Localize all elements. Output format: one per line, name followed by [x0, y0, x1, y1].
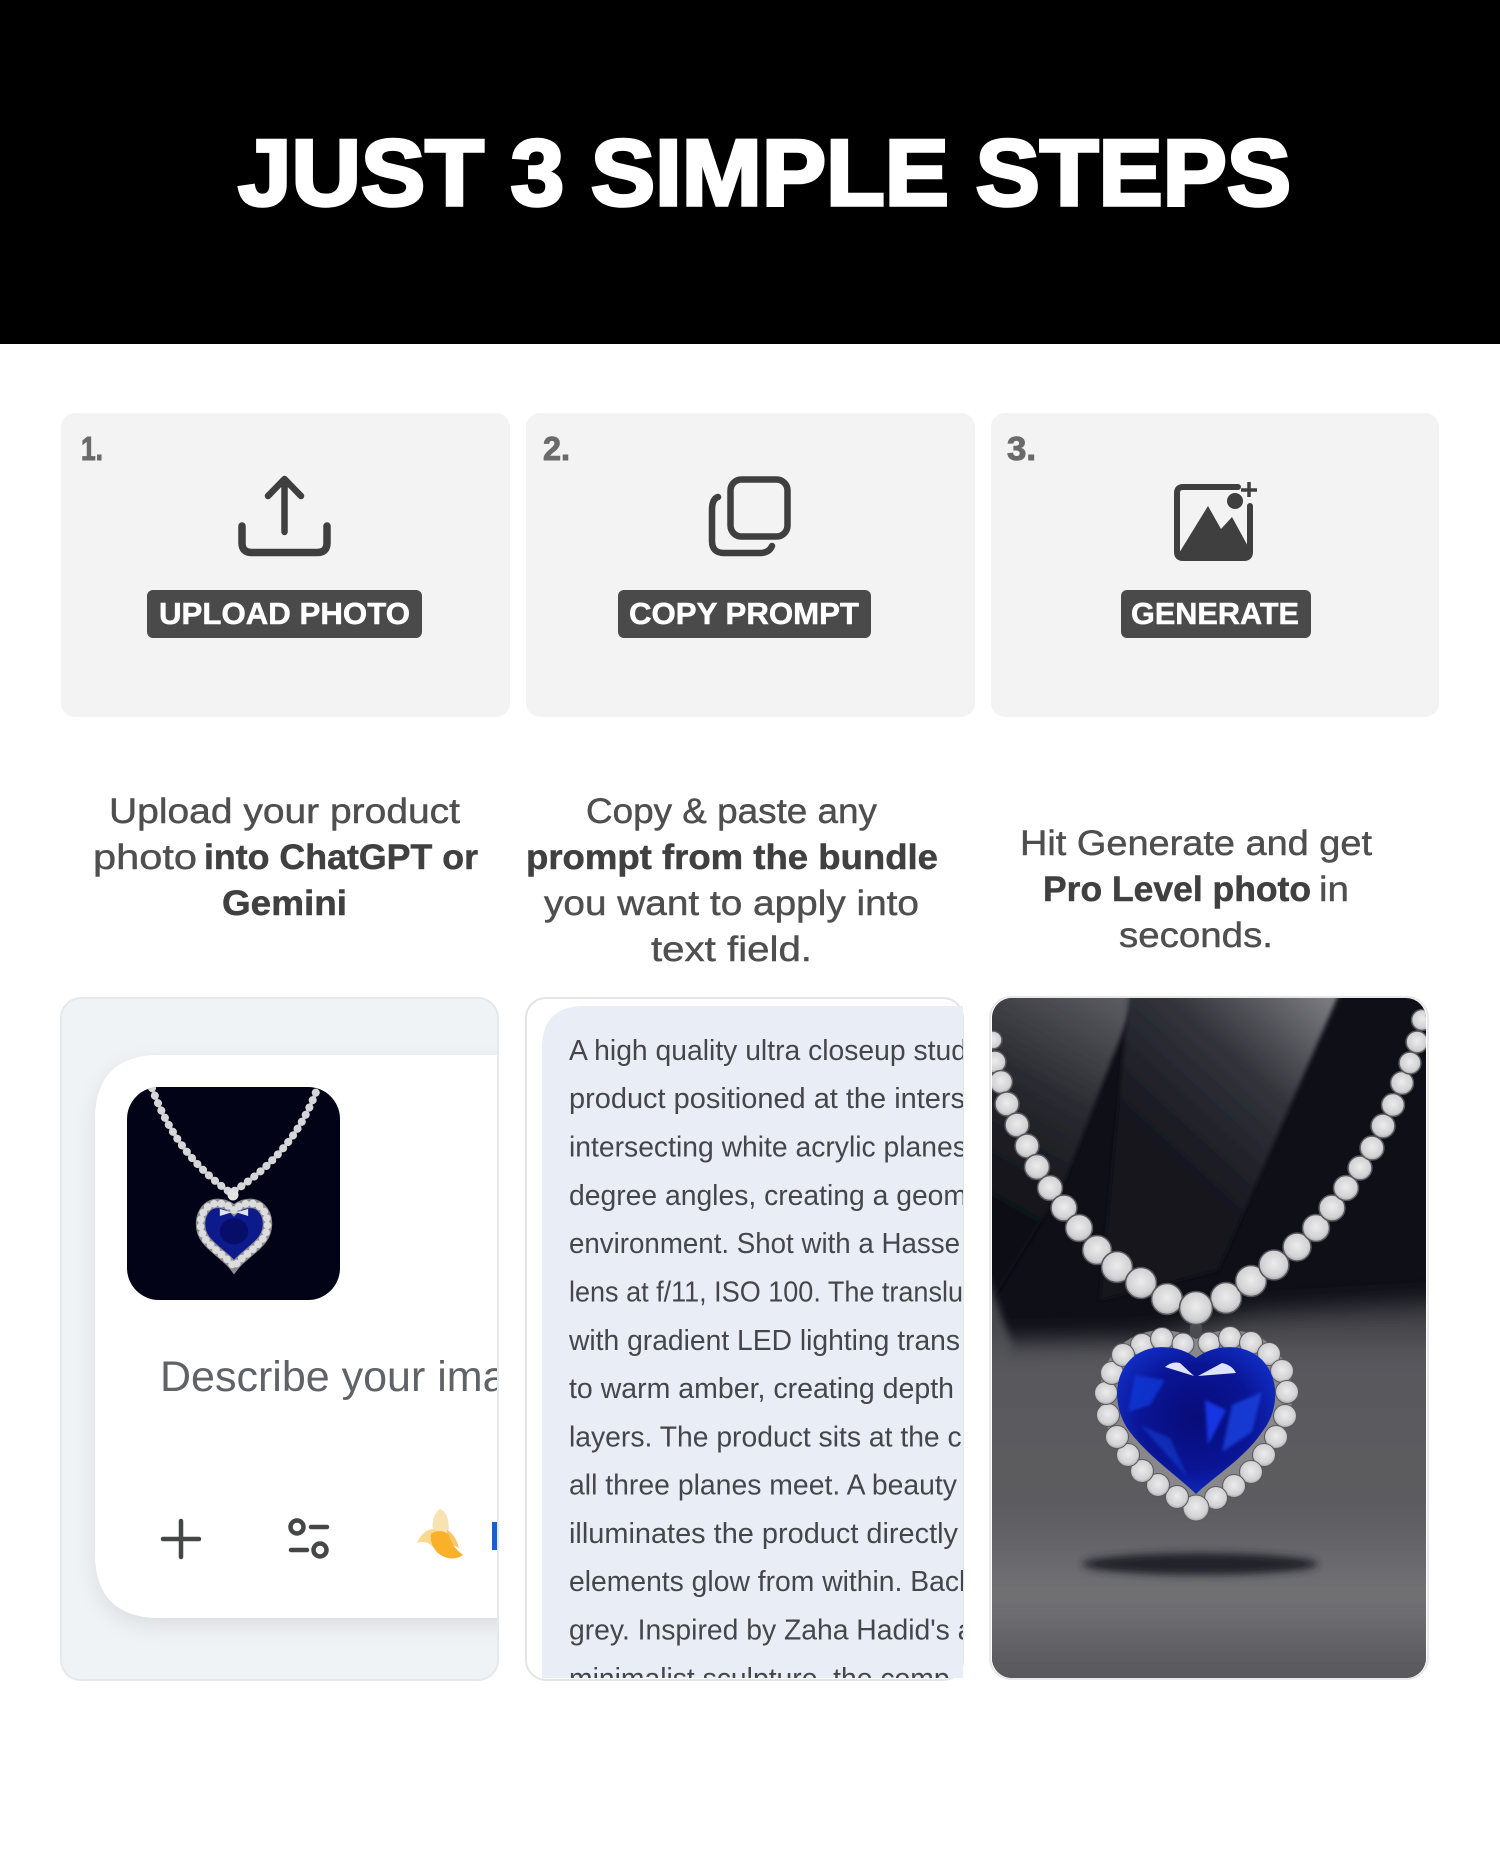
prompt text: with gradient LED lighting trans: [568, 1324, 960, 1356]
text block: step 2 description: you want to apply into: [544, 884, 919, 923]
text block: step 2 description: text field.: [651, 930, 812, 969]
icon: blue button edge: [492, 1522, 497, 1550]
text block: step 3 description: in: [1319, 870, 1349, 909]
label: upload photo: UPLOAD PHOTO: [159, 596, 410, 631]
step number 3: 3.: [1007, 430, 1036, 467]
input placeholder: Describe your image: [160, 1353, 554, 1401]
prompt text: to warm amber, creating depth: [569, 1372, 954, 1404]
icon: upload: [242, 479, 327, 552]
icon: sliders: [290, 1520, 327, 1556]
sapphire heart: [1117, 1347, 1275, 1494]
text block: step 2 description: prompt from the bundle: [526, 838, 938, 877]
prompt text: lens at f/11, ISO 100. The translu: [569, 1276, 963, 1308]
label: generate: GENERATE: [1131, 596, 1299, 631]
shadow: [1082, 1553, 1318, 1575]
prompt text: minimalist sculpture, the comp: [569, 1662, 950, 1694]
text block: step 3 description: Pro Level photo: [1043, 870, 1311, 909]
prompt text: all three planes meet. A beauty: [569, 1468, 958, 1500]
icon: copy: [712, 480, 788, 553]
text block: step 3 description: [1020, 824, 1372, 955]
pendant halo: [1094, 1326, 1298, 1521]
prompt text: environment. Shot with a Hasse: [569, 1227, 960, 1259]
prompt text: illuminates the product directly: [569, 1517, 959, 1549]
step number 1: 1.: [81, 430, 103, 467]
prompt text: product positioned at the inters: [569, 1082, 965, 1114]
prompt text: [568, 1034, 974, 1694]
prompt bubble: [542, 1006, 980, 1700]
icon: banana: [417, 1509, 463, 1558]
photo backdrop: [992, 998, 1426, 1678]
label: generate: [1121, 590, 1311, 638]
step number 2: 2.: [543, 430, 570, 467]
text block: step 3 description: Hit Generate and get: [1020, 824, 1372, 863]
panel: step 2 copy prompt: [526, 413, 975, 717]
photo floor: [992, 1291, 1426, 1678]
panel: step 3 generate: [991, 413, 1439, 717]
text block: step 1 description: Upload your product: [109, 792, 460, 831]
title: JUST 3 SIMPLE STEPS: [238, 120, 1291, 225]
panel: generated photo: [989, 996, 1429, 1680]
label: copy prompt: COPY PROMPT: [629, 596, 859, 631]
prompt text: layers. The product sits at the c: [569, 1420, 962, 1452]
prompt text: elements glow from within. Back: [569, 1565, 974, 1597]
text block: step 1 description: Gemini: [222, 884, 347, 923]
label: upload photo: [147, 590, 422, 638]
panel: step 1 upload photo: [61, 413, 510, 717]
prompt box: [95, 1055, 520, 1618]
panel: upload screenshot: [60, 997, 499, 1681]
icon: image generate: [1176, 482, 1257, 558]
text block: step 2 description: Copy & paste any: [586, 792, 878, 831]
text block: step 1 description: photo: [93, 838, 197, 877]
text block: step 1 description: [93, 792, 478, 923]
pendant bail: [1190, 1325, 1202, 1337]
prompt text: intersecting white acrylic planes: [569, 1130, 967, 1162]
label: copy prompt: [618, 590, 871, 638]
necklace chain: [984, 1010, 1432, 1324]
text block: step 2 description: [526, 792, 938, 969]
thumbnail: necklace photo: [127, 1087, 340, 1300]
text block: step 1 description: into ChatGPT or: [204, 838, 478, 877]
prompt text: degree angles, creating a geom: [569, 1179, 967, 1211]
icon: plus: [163, 1521, 199, 1557]
header band: [0, 0, 1500, 344]
text block: step 3 description: seconds.: [1119, 916, 1273, 955]
prompt text: A high quality ultra closeup stud: [569, 1034, 967, 1066]
prompt text: grey. Inspired by Zaha Hadid's a: [569, 1614, 974, 1646]
panel: prompt screenshot: [526, 998, 980, 1700]
